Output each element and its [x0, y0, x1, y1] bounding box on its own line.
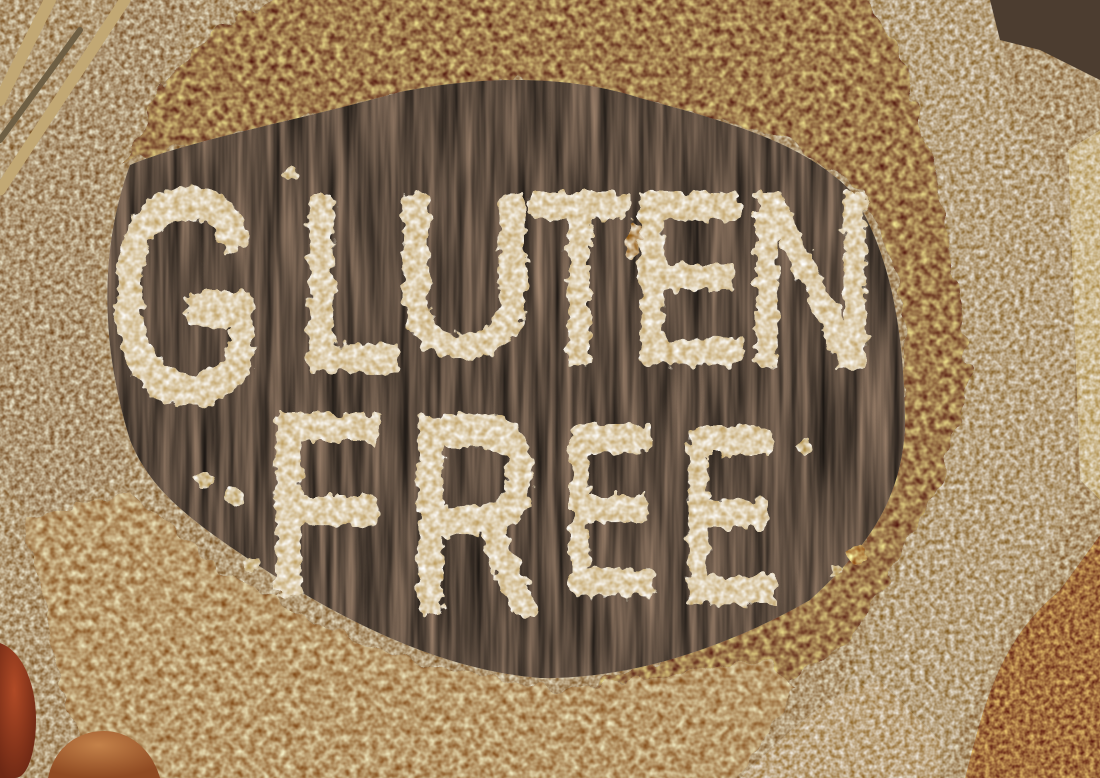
wheat stalks top left	[0, 0, 125, 190]
word: FREE: R	[406, 362, 543, 666]
word: GLUTEN	[109, 132, 878, 461]
band: toasted grain top arc	[125, 0, 970, 778]
dark wood corner top right	[990, 0, 1100, 80]
word: GLUTEN: G	[109, 132, 265, 461]
wood board oval	[107, 80, 905, 678]
word: GLUTEN: T	[528, 145, 630, 411]
word: GLUTEN: L	[297, 148, 402, 420]
word: FREE	[263, 362, 779, 666]
word: FREE: E	[561, 379, 658, 643]
band: golden grain bottom arc	[25, 490, 800, 778]
right edge pale grain column	[1068, 130, 1100, 500]
egg bottom	[48, 731, 160, 778]
fur bottom right	[965, 535, 1100, 778]
word: GLUTEN: N	[744, 144, 878, 415]
word: GLUTEN: E	[629, 148, 748, 411]
egg left	[0, 643, 36, 778]
wheat husk bottom centre	[740, 680, 940, 778]
word: GLUTEN: U	[391, 151, 538, 401]
scattered crumbs	[195, 168, 866, 576]
word: FREE: F	[263, 364, 384, 643]
word: FREE: E	[679, 379, 779, 653]
